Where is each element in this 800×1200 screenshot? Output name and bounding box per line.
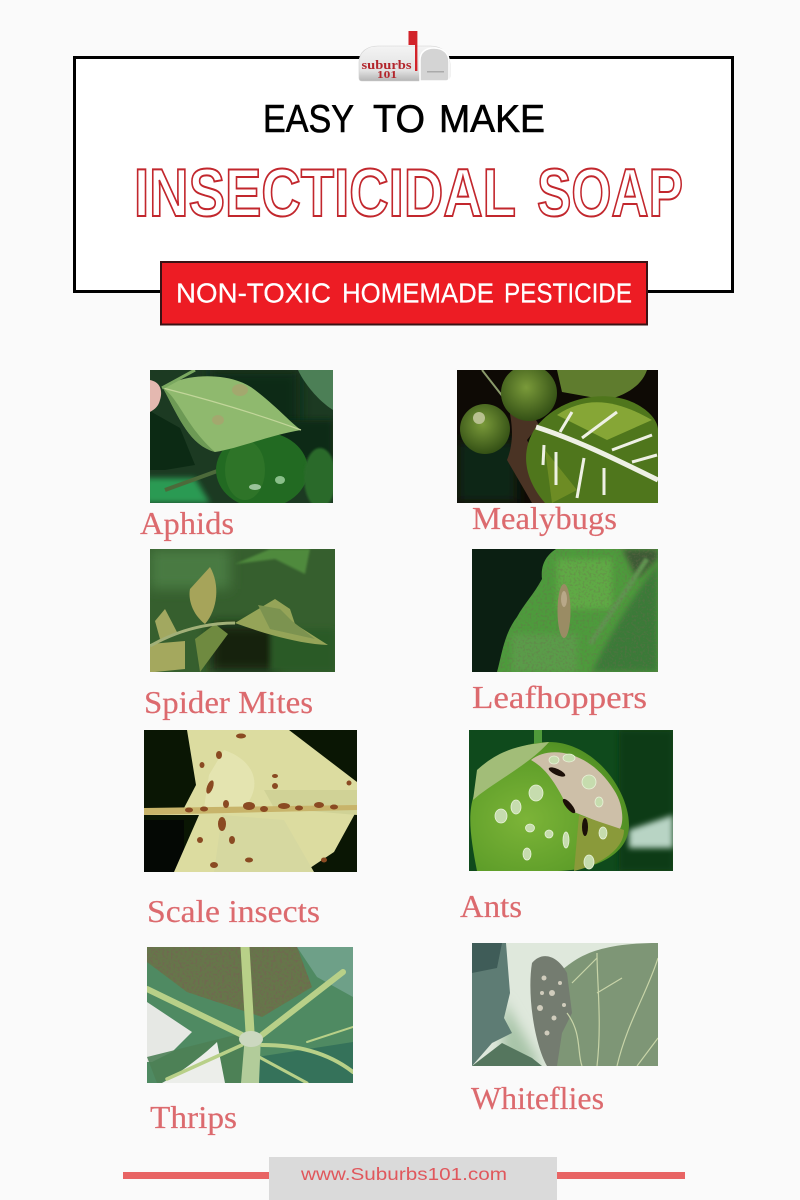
photo: spider mites on tomato leaf xyxy=(150,549,335,672)
logo: mailbox: 101 xyxy=(377,70,397,81)
label: thrips: Thrips xyxy=(150,1099,237,1135)
photo: scale insects on pale leaf xyxy=(144,730,357,872)
subtitle: easy to make: MAKE xyxy=(439,98,545,141)
label: scale insects: Scale insects xyxy=(147,893,320,929)
banner: non-toxic homemade pesticide: PESTICIDE xyxy=(504,278,632,308)
photo: whiteflies on leaf underside xyxy=(472,943,658,1066)
logo: mailbox xyxy=(359,31,450,81)
subtitle: easy to make: EASY xyxy=(263,98,354,141)
photo: leafhopper on leaf xyxy=(472,549,658,672)
banner: non-toxic homemade pesticide xyxy=(161,262,647,324)
photo: thrips on underside of leaf xyxy=(147,947,353,1083)
header panel xyxy=(74,31,732,292)
label: spider mites: Spider Mites xyxy=(144,684,313,720)
title: insecticidal soap: SOAP xyxy=(537,155,683,231)
photo: aphids damaged pepper leaf xyxy=(150,370,333,503)
title: insecticidal soap: INSECTICIDAL xyxy=(134,155,516,231)
footer xyxy=(123,1157,685,1200)
banner: non-toxic homemade pesticide: HOMEMADE xyxy=(342,278,494,308)
photo: mealybugs on fruit and leaf xyxy=(457,370,658,503)
subtitle: easy to make: TO xyxy=(373,98,425,141)
footer: www.Suburbs101.com xyxy=(300,1164,507,1184)
label: leafhoppers: Leafhoppers xyxy=(472,679,647,715)
label: whiteflies: Whiteflies xyxy=(471,1080,604,1116)
photo: ants on green bud with dew xyxy=(469,730,673,871)
label: ants: Ants xyxy=(460,888,522,924)
subtitle: easy to make xyxy=(263,98,545,141)
label: mealybugs: Mealybugs xyxy=(472,500,617,536)
label: aphids: Aphids xyxy=(140,505,234,541)
logo: mailbox: suburbs xyxy=(362,58,412,72)
banner: non-toxic homemade pesticide: NON-TOXIC xyxy=(176,278,331,308)
